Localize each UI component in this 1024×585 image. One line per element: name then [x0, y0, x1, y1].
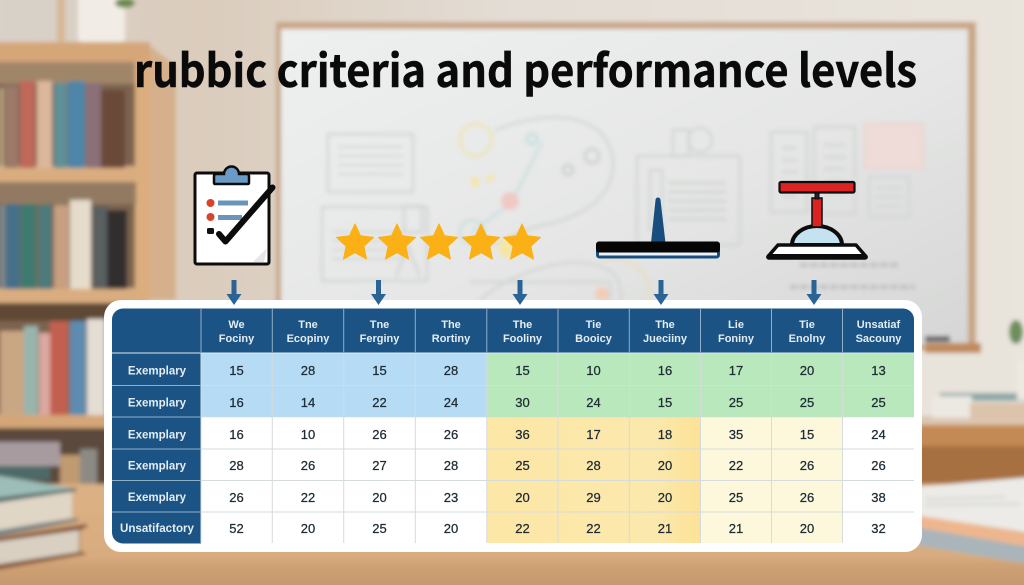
row 2: 25 [729, 395, 743, 410]
right side table [900, 393, 1024, 491]
row 6: Unsatifactory [120, 523, 195, 535]
icon: spire on a bar [596, 198, 720, 258]
arrow: clipboard to table [226, 280, 242, 305]
column headers [219, 319, 902, 345]
row 1: 15 [372, 363, 387, 378]
row 6: 20 [301, 521, 315, 536]
whiteboard [276, 22, 981, 353]
row 4 [128, 458, 886, 473]
row header column [112, 352, 201, 544]
column headers: Booicy [575, 333, 613, 345]
row 4: 20 [658, 458, 672, 473]
column headers: Lie [728, 319, 744, 331]
row 2: 24 [444, 395, 458, 410]
column headers: Fociny [219, 333, 255, 345]
row 2: 22 [372, 395, 387, 410]
plant on the right [1009, 320, 1024, 400]
row 4: 26 [871, 458, 886, 473]
row 4: 28 [229, 458, 244, 473]
icon: red stamp [767, 182, 867, 258]
row 4: 27 [372, 458, 387, 473]
faint board sketches [322, 118, 909, 337]
row 5: 20 [658, 490, 672, 505]
row 4: 22 [729, 458, 743, 473]
column headers: Tne [298, 319, 318, 331]
row 3 [128, 427, 886, 442]
column headers: Sacouny [856, 333, 902, 345]
row 6: 21 [658, 521, 672, 536]
row 1: 28 [444, 363, 458, 378]
row 2: 25 [871, 395, 886, 410]
row 5: 22 [301, 490, 315, 505]
row 6: 20 [800, 521, 814, 536]
row 2 [128, 395, 886, 410]
row 1: 15 [229, 363, 244, 378]
arrow: stamp to table [806, 280, 822, 305]
row 6: 22 [515, 521, 530, 536]
row 4: Exemplary [128, 460, 187, 472]
icon: clipboard with check [195, 166, 272, 264]
books stacked in bottom shelf [0, 442, 97, 485]
row 3: Exemplary [128, 430, 187, 442]
column headers: We [228, 319, 245, 331]
row 3: 18 [658, 427, 672, 442]
row 5: 20 [372, 490, 387, 505]
row 5: 25 [729, 490, 743, 505]
column headers: Fooliny [503, 333, 543, 345]
row 4: 26 [301, 458, 315, 473]
row 4: 28 [586, 458, 601, 473]
icon: five stars [336, 224, 540, 259]
row 2: 14 [301, 395, 315, 410]
column headers: The [655, 319, 675, 331]
panel: rubric table card [104, 300, 922, 552]
row 1: 20 [800, 363, 814, 378]
row 5: 38 [871, 490, 886, 505]
row 6: 52 [229, 521, 244, 536]
row 5: Exemplary [128, 492, 187, 504]
row 3: 15 [800, 427, 814, 442]
column headers: Tne [370, 319, 389, 331]
row 3: 26 [444, 427, 458, 442]
row 3: 10 [301, 427, 315, 442]
papers on the right [915, 477, 1024, 564]
row 3: 26 [372, 427, 387, 442]
row 2: Exemplary [128, 398, 187, 410]
row 4: 28 [444, 458, 458, 473]
column headers: Foniny [718, 333, 755, 345]
column headers: The [513, 319, 532, 331]
bookcase [0, 42, 176, 490]
row 3: 16 [229, 427, 244, 442]
row 3: 35 [729, 427, 743, 442]
row 1: 16 [658, 363, 672, 378]
column headers: Jueciiny [643, 333, 688, 345]
grid lines [112, 309, 914, 543]
row 5: 23 [444, 490, 458, 505]
row 1: 13 [871, 363, 886, 378]
column headers: Ecopiny [287, 333, 330, 345]
header band [112, 308, 914, 352]
table body fills [201, 353, 914, 543]
desk [0, 484, 1024, 585]
row 4: 26 [800, 458, 814, 473]
row 6: 32 [871, 521, 886, 536]
stack of books on the left [0, 475, 87, 570]
arrow: stars to table [371, 280, 386, 305]
row 6: 25 [372, 521, 387, 536]
row 3: 36 [515, 427, 530, 442]
column headers: Enolny [789, 333, 826, 345]
column headers: Ferginy [360, 333, 400, 345]
row 1: 17 [729, 363, 743, 378]
row 4: 25 [515, 458, 530, 473]
row 5: 29 [586, 490, 601, 505]
row 2: 24 [586, 395, 601, 410]
row 5: 26 [800, 490, 814, 505]
row 3: 24 [871, 427, 886, 442]
row 5 [128, 490, 886, 505]
title: rubbic criteria and performance levels [134, 35, 917, 100]
row 1: 10 [586, 363, 601, 378]
arrow: centre to table [512, 280, 528, 305]
books on lower shelf [0, 319, 105, 415]
books on middle shelf [0, 200, 127, 289]
row 1: 28 [301, 363, 315, 378]
row 1 [128, 363, 886, 378]
arrow: spire to table [654, 280, 668, 305]
top shelf plant pot [57, 0, 135, 43]
row 2: 15 [658, 395, 672, 410]
row 6: 22 [586, 521, 601, 536]
row 6 [120, 521, 886, 536]
row 6: 21 [729, 521, 743, 536]
row 3: 17 [586, 427, 601, 442]
row 1: Exemplary [128, 366, 187, 378]
column headers: Tie [799, 319, 815, 331]
row 1: 15 [515, 363, 530, 378]
row 5: 26 [229, 490, 244, 505]
column headers: Tie [586, 319, 601, 331]
column headers: Unsatiaf [857, 319, 901, 331]
row 2: 16 [229, 395, 244, 410]
row 2: 25 [800, 395, 814, 410]
column headers: The [441, 319, 461, 331]
column headers: Rortiny [432, 333, 471, 345]
books on top shelf [0, 81, 125, 168]
row 5: 20 [515, 490, 530, 505]
row 2: 30 [515, 395, 530, 410]
row 6: 20 [444, 521, 458, 536]
